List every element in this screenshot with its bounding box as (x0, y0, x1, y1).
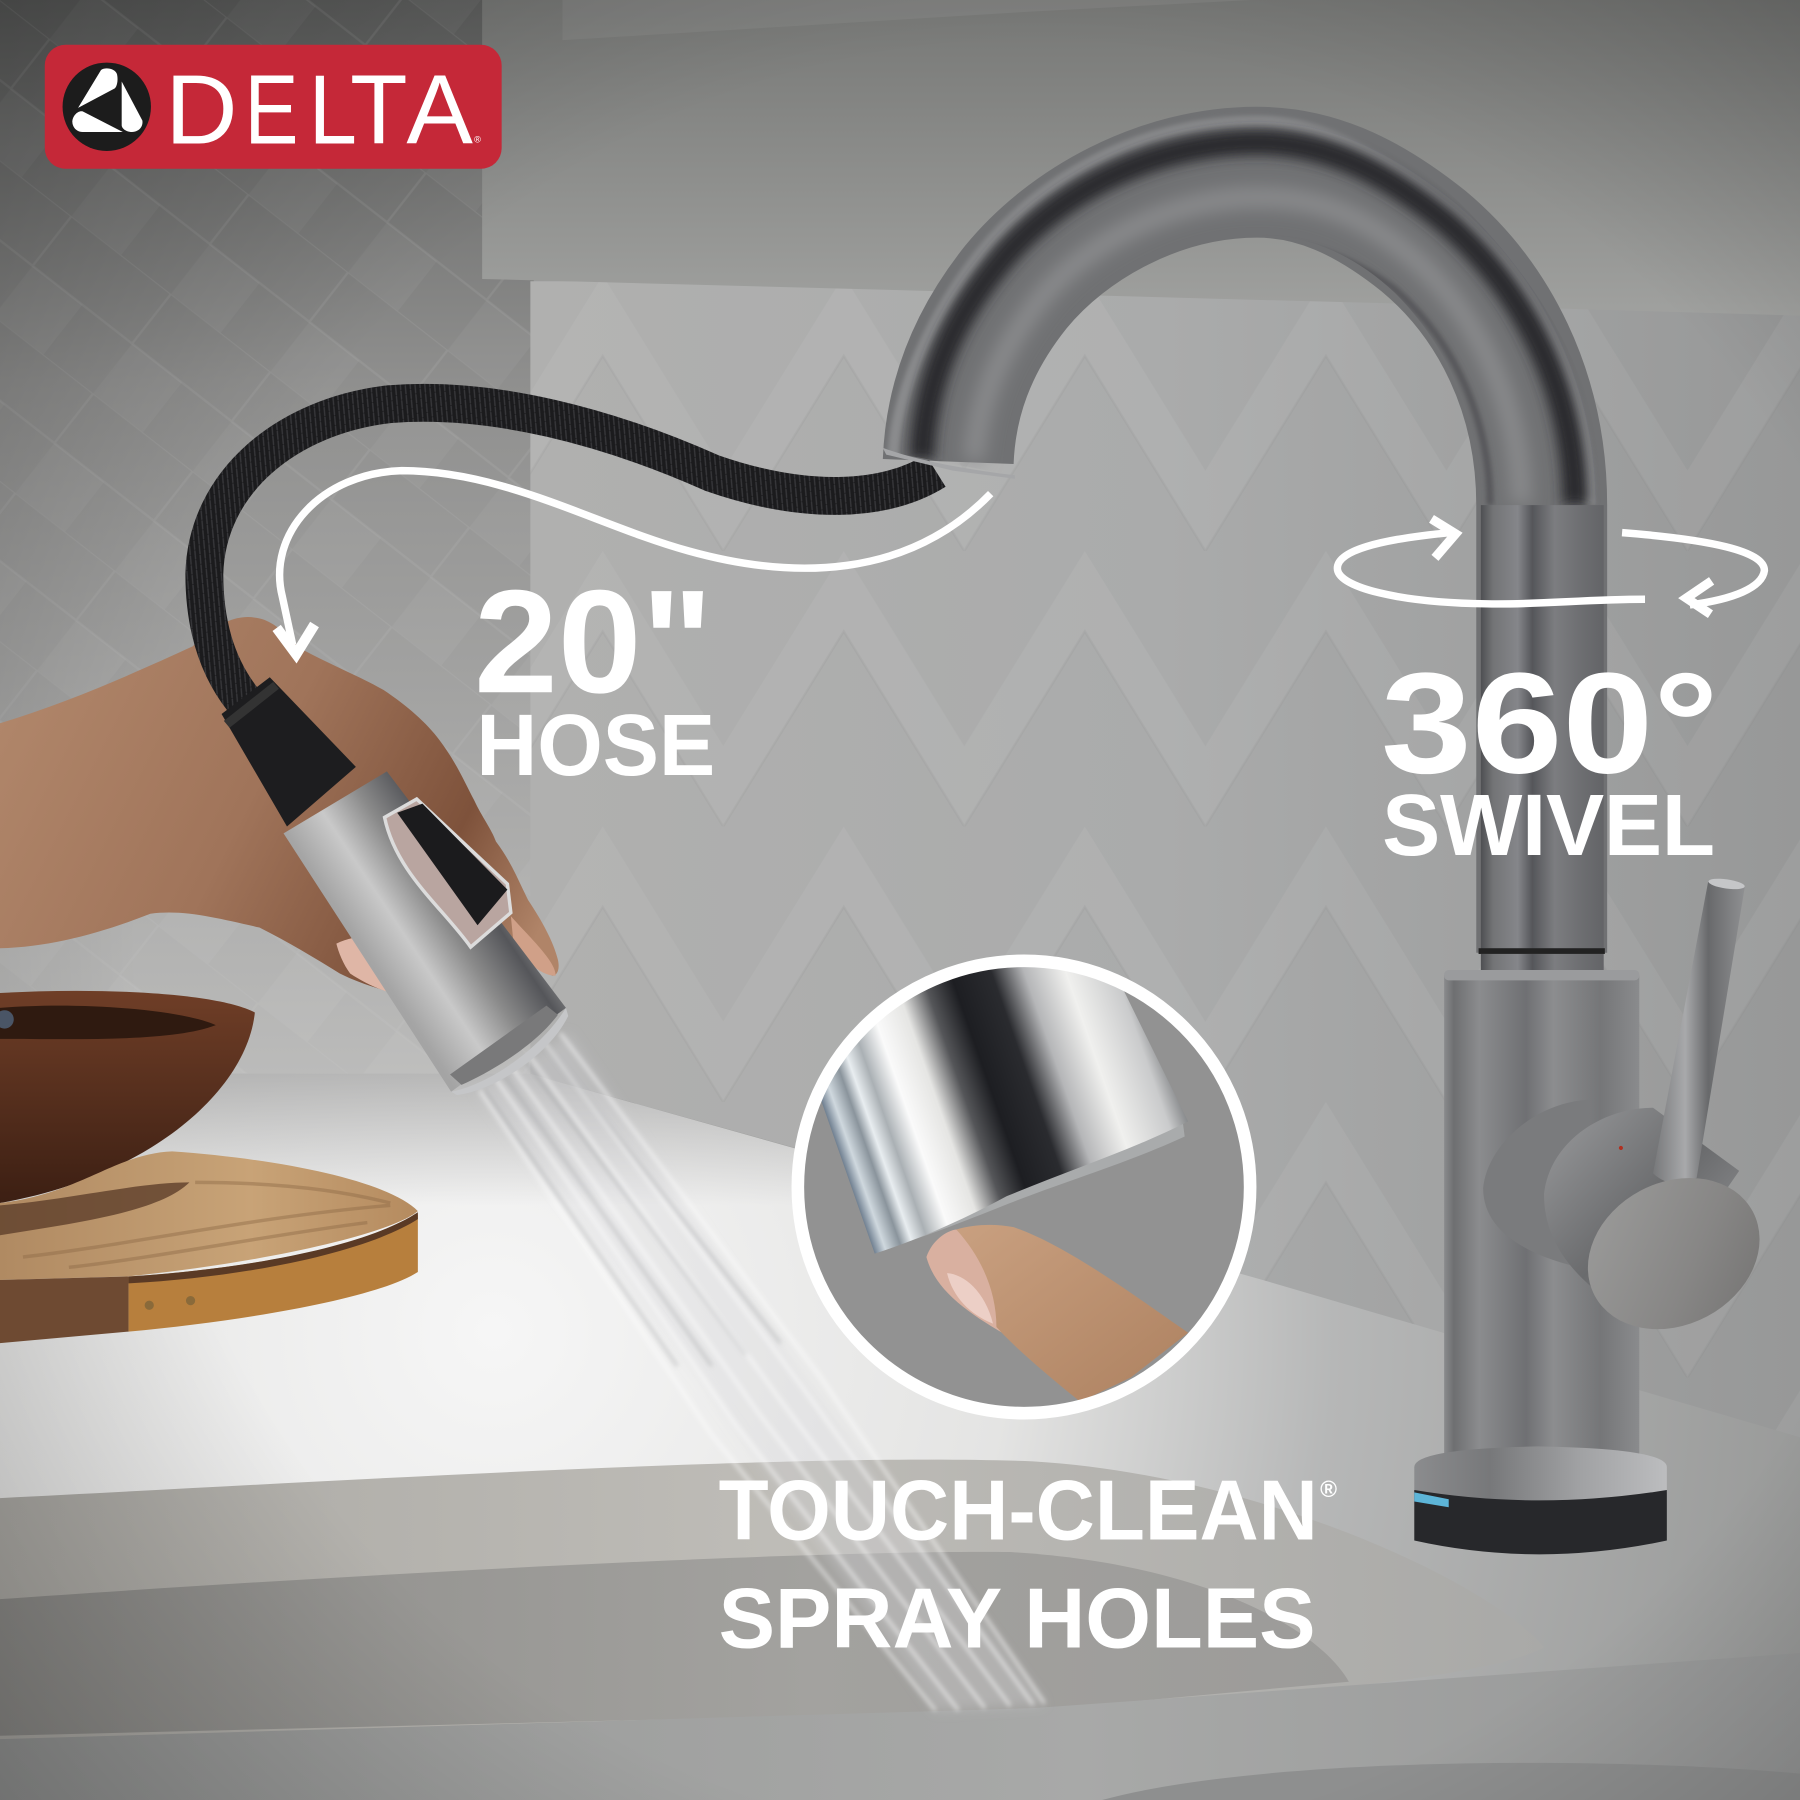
label: 20 inch hose: 20" (474, 560, 713, 724)
label: 360 degree swivel: 360° (1381, 644, 1718, 804)
label: touch-clean spray holes: SPRAY HOLES (719, 1570, 1316, 1665)
connection arrow: 20 inch hose length (277, 471, 991, 654)
faucet body and handle (1414, 877, 1786, 1554)
water spray (476, 1033, 1045, 1710)
logo: Delta: L (309, 54, 357, 164)
label: touch-clean spray holes: ® (1320, 1476, 1337, 1502)
sprayer head (222, 677, 568, 1095)
pull-down hose (204, 403, 936, 700)
logo: Delta: ® (474, 134, 481, 144)
logo: Delta: T (350, 54, 408, 164)
logo: Delta: E (245, 54, 298, 164)
logo: Delta: A (406, 54, 473, 164)
logo: Delta: D (165, 54, 238, 164)
swivel arrows (1337, 519, 1764, 614)
hand holding sprayer (0, 617, 559, 994)
logo: Delta (45, 45, 502, 169)
label: 20 inch hose (474, 560, 715, 794)
faucet spout and column (883, 122, 1605, 977)
label: 360 degree swivel: SWIVEL (1382, 777, 1715, 874)
wooden bowl (0, 991, 255, 1203)
label: 360 degree swivel (1381, 644, 1718, 874)
touch-clean inset circle (798, 936, 1250, 1413)
cutting board with leather strap (0, 1151, 418, 1343)
label: touch-clean spray holes (719, 1462, 1337, 1665)
label: touch-clean spray holes: TOUCH-CLEAN (719, 1462, 1318, 1557)
label: 20 inch hose: HOSE (476, 697, 715, 794)
